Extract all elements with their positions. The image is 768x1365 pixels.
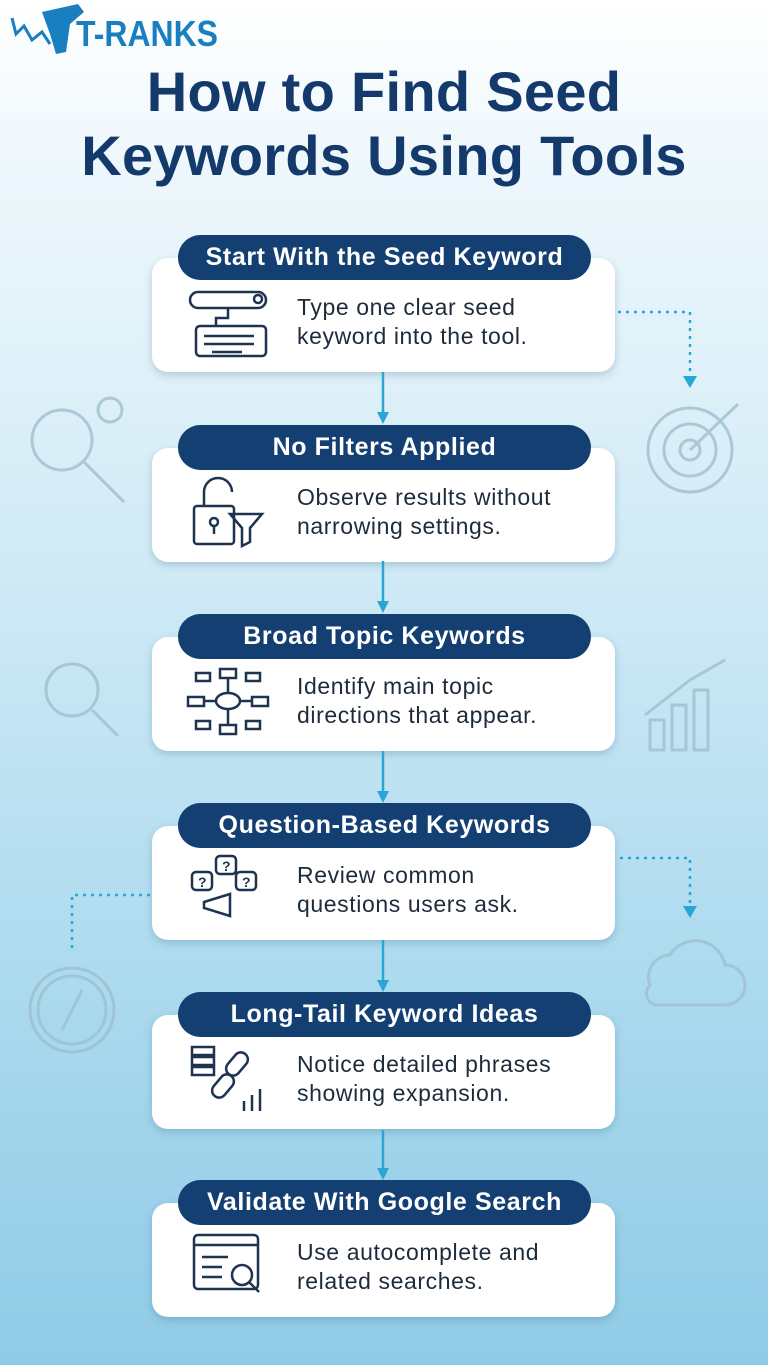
text (297, 1051, 551, 1106)
text: Identify main topic (297, 673, 494, 699)
text (297, 484, 551, 539)
pill: step 6 (178, 1180, 591, 1225)
text: questions users ask. (297, 891, 519, 917)
text (297, 1239, 539, 1294)
step 3 card (152, 637, 615, 751)
pill: step 1 (178, 235, 591, 280)
step 6 card (152, 1203, 615, 1317)
pill: step 4 (178, 803, 591, 848)
title: How to Find Seed (147, 60, 621, 123)
text (297, 294, 528, 349)
icon: question bubbles and megaphone: ? (242, 874, 251, 890)
pill: step 4: Question-Based Keywords (219, 811, 550, 839)
pill: step 5 (178, 992, 591, 1037)
arrow (377, 1130, 389, 1180)
arrow (377, 940, 389, 992)
pill: step 5: Long-Tail Keyword Ideas (231, 1000, 538, 1028)
text: Observe results without (297, 484, 551, 510)
text: Review common (297, 862, 475, 888)
logo (10, 4, 218, 54)
text: Notice detailed phrases (297, 1051, 551, 1077)
pill: step 1: Start With the Seed Keyword (206, 243, 563, 271)
icon: chain and chart (190, 1046, 262, 1111)
icon: lock and filter (192, 476, 265, 548)
title: Keywords Using Tools (81, 124, 687, 187)
text: Use autocomplete and (297, 1239, 539, 1265)
step 2 card (152, 448, 615, 562)
step 1 card (152, 258, 615, 372)
icon: topic map (186, 668, 270, 736)
title (81, 60, 687, 187)
pill: step 2: No Filters Applied (273, 433, 496, 461)
text: showing expansion. (297, 1080, 510, 1106)
step 5 card (152, 1015, 615, 1129)
pill: step 3 (178, 614, 591, 659)
text: Type one clear seed (297, 294, 516, 320)
text: narrowing settings. (297, 513, 501, 539)
text (297, 673, 537, 728)
icon: question bubbles and megaphone: ? (198, 874, 207, 890)
step 4 card (152, 826, 615, 940)
pill: step 6: Validate With Google Search (207, 1188, 562, 1216)
pill: step 2 (178, 425, 591, 470)
text: keyword into the tool. (297, 323, 528, 349)
arrow (377, 561, 389, 613)
arrow (377, 751, 389, 803)
icon: question bubbles and megaphone (190, 854, 258, 918)
icon: question bubbles and megaphone: ? (222, 858, 231, 874)
text: directions that appear. (297, 702, 537, 728)
icon: search bar and keyboard (188, 290, 268, 358)
text: related searches. (297, 1268, 484, 1294)
icon: browser with magnifier (192, 1234, 260, 1293)
arrow (377, 372, 389, 424)
pill: step 3: Broad Topic Keywords (243, 622, 526, 650)
text (297, 862, 519, 917)
